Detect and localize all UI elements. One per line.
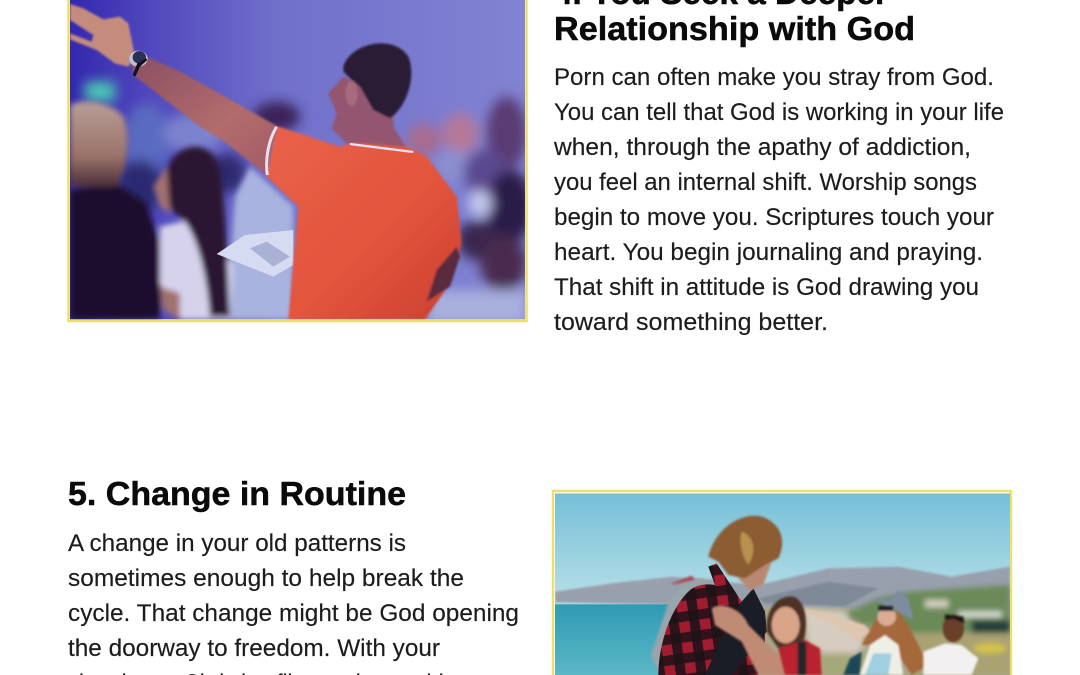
text block: section 5 body: the doorway to freedom. With your bbox=[68, 635, 440, 662]
text block: section 5 body: sometimes enough to help break the bbox=[68, 565, 464, 592]
mountains bbox=[555, 567, 1010, 618]
head bbox=[328, 43, 411, 148]
heading: section 4: Relationship with God bbox=[554, 10, 915, 47]
text block: section 4 body: That shift in attitude is God drawing you bbox=[554, 274, 979, 301]
heading: section 5: 5. Change in Routine bbox=[68, 475, 406, 512]
text block: section 4 body: you feel an internal shift. Worship songs bbox=[554, 169, 977, 196]
shirt bbox=[267, 126, 462, 319]
man bbox=[658, 563, 765, 675]
girl bbox=[767, 597, 822, 675]
text block: section 4 body: toward something better. bbox=[554, 309, 828, 336]
text block: section 4 body: Porn can often make you stray from God. bbox=[554, 64, 994, 91]
book bbox=[217, 230, 293, 277]
woman in white bbox=[923, 614, 978, 675]
photo: friends hiking on the coast bbox=[553, 491, 1011, 675]
photo: man worshipping with raised arm bbox=[68, 0, 533, 323]
text block: section 5 body: A change in your old patterns is bbox=[68, 530, 406, 557]
arm and hand bbox=[70, 4, 277, 175]
woman with hat bbox=[805, 590, 928, 675]
hills bbox=[802, 585, 1010, 675]
crowd left bbox=[70, 101, 293, 319]
watch bbox=[129, 51, 148, 77]
text block: section 4 body bbox=[553, 64, 1004, 336]
text block: section 5 body bbox=[68, 530, 519, 675]
text block: section 4 body: You can tell that God is working in your life bbox=[554, 99, 1004, 126]
backpack bbox=[650, 574, 714, 674]
text block: section 4 body: heart. You begin journaling and praying. bbox=[554, 239, 983, 266]
text block: section 4 body: when, through the apathy of addiction, bbox=[553, 134, 971, 161]
text block: section 5 body: cycle. That change might be God opening bbox=[68, 600, 519, 627]
text block: section 4 body: begin to move you. Scriptures touch your bbox=[554, 204, 994, 231]
